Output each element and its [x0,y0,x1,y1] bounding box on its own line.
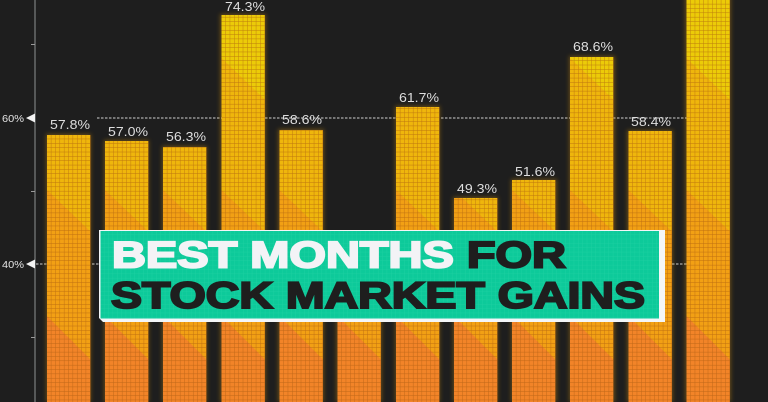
bar 2 [105,141,148,402]
title line 1: BEST MONTHS FOR [112,234,566,276]
bar value labels: 68.6% [573,40,613,54]
bar 11 [628,131,672,402]
bar 7 [396,107,440,402]
bar 6 [338,322,381,402]
bar 5 [280,130,323,402]
bar value labels: 57.0% [108,125,148,139]
dashed gridlines [36,118,700,264]
bar 12 [686,0,730,402]
bar 4 [222,0,266,402]
bar value labels: 49.3% [457,182,497,196]
bar value labels: 51.6% [515,165,555,179]
y axis with ticks and labels: 60% [2,113,24,125]
bar 9 [512,180,556,402]
bar value labels: 61.7% [399,91,439,105]
title banner [99,230,665,322]
bar value labels: 58.4% [631,115,671,129]
bar value labels: 57.8% [50,118,90,132]
bar value labels: 74.3% [225,0,265,14]
bar value labels [50,0,671,196]
y axis with ticks and labels [2,0,36,402]
title line 2: STOCK MARKET GAINS [111,275,645,316]
bar 1 [47,135,90,402]
bar value labels: 56.3% [166,130,206,144]
bar value labels: 58.6% [282,113,322,127]
bar 10 [570,57,614,402]
y axis with ticks and labels: 40% [2,259,24,271]
bar 8 [454,198,498,402]
bar 3 [163,147,206,402]
